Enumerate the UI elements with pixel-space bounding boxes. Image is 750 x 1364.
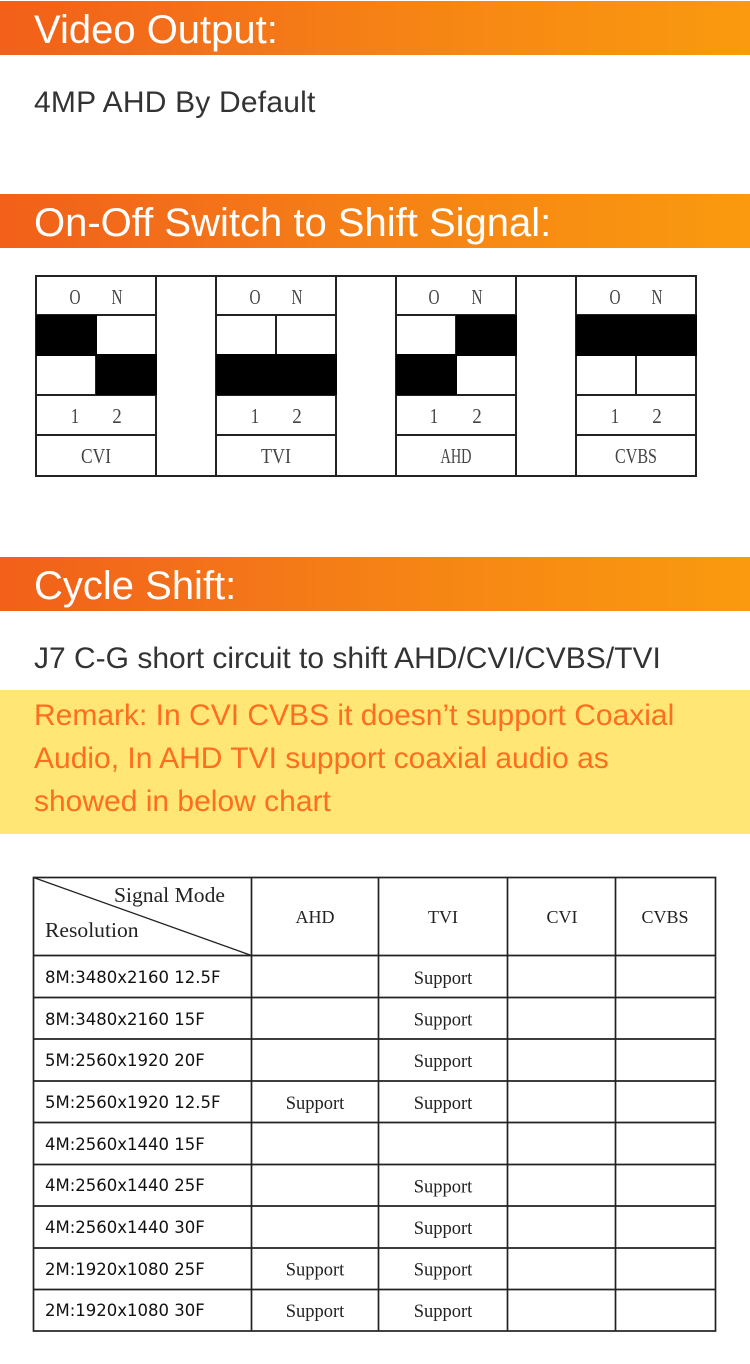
banner: On-Off Switch (0, 194, 750, 248)
diagram: switch settings: 2 (472, 404, 482, 428)
diagram: switch settings: O (70, 285, 80, 309)
table: resolution support by signal mode: Support (414, 1010, 473, 1030)
table: resolution support by signal mode: Support (286, 1094, 345, 1114)
diagram: switch settings: N (112, 285, 122, 309)
table: resolution support by signal mode: 5M:2560x1920 12.5F (45, 1093, 221, 1112)
diagram: switch settings: CVBS (615, 444, 657, 468)
table: resolution support by signal mode (32, 876, 716, 1332)
diagram: switch settings: 1 (71, 404, 79, 428)
banner: Cycle Shift (0, 557, 750, 611)
diagram: switch settings: 2 (112, 404, 122, 428)
diagram: switch settings: O (610, 285, 620, 309)
banner: On-Off Switch: On-Off Switch to Shift Signal: (34, 201, 551, 245)
table: resolution support by signal mode: 4M:2560x1440 25F (45, 1176, 205, 1195)
table: resolution support by signal mode: Resolution (45, 918, 139, 942)
diagram: switch settings: N (292, 285, 302, 309)
callout: remark: Remark: In CVI CVBS it doesn’t support Coaxial (34, 699, 674, 732)
diagram: switch settings: N (472, 285, 482, 309)
callout: remark (0, 690, 750, 834)
diagram: switch settings (35, 275, 697, 477)
table: resolution support by signal mode: Support (286, 1260, 345, 1280)
table: resolution support by signal mode: Signal Mode (114, 883, 225, 907)
table: resolution support by signal mode: 4M:2560x1440 15F (45, 1135, 205, 1154)
table: resolution support by signal mode: Support (286, 1302, 345, 1322)
diagram: switch settings: 1 (430, 404, 438, 428)
diagram: switch settings: 1 (611, 404, 619, 428)
diagram: switch settings: N (652, 285, 662, 309)
table: resolution support by signal mode: Support (414, 1094, 473, 1114)
diagram: switch settings: 2 (652, 404, 662, 428)
callout: remark: showed in below chart (34, 785, 331, 818)
diagram: switch settings: O (250, 285, 260, 309)
diagram: switch settings: TVI (261, 444, 291, 468)
diagram: switch settings: O (428, 285, 440, 309)
table: resolution support by signal mode: CVI (546, 907, 578, 927)
diagram: switch settings: 2 (292, 404, 302, 428)
table: resolution support by signal mode: Support (414, 1178, 473, 1198)
table: resolution support by signal mode: Support (414, 1260, 473, 1280)
table: resolution support by signal mode: Support (414, 1302, 473, 1322)
table: resolution support by signal mode: 5M:2560x1920 20F (45, 1051, 205, 1070)
table: resolution support by signal mode: 2M:1920x1080 30F (45, 1301, 205, 1320)
banner: Cycle Shift: Cycle Shift: (34, 564, 236, 608)
table: resolution support by signal mode: CVBS (641, 907, 689, 927)
table: resolution support by signal mode: TVI (428, 907, 458, 927)
table: resolution support by signal mode: 8M:3480x2160 12.5F (45, 968, 221, 987)
callout: remark: Audio, In AHD TVI support coaxial audio as (34, 742, 609, 775)
text: default mode: 4MP AHD By Default (34, 86, 316, 119)
table: resolution support by signal mode: AHD (296, 907, 334, 927)
diagram: switch settings: CVI (81, 444, 111, 468)
table: resolution support by signal mode: 4M:2560x1440 30F (45, 1218, 205, 1237)
diagram: switch settings: 1 (251, 404, 259, 428)
table: resolution support by signal mode: 8M:3480x2160 15F (45, 1010, 205, 1029)
text: cycle shift instruction: J7 C-G short circuit to shift AHD/CVI/CVBS/TVI (34, 642, 661, 675)
diagram: switch settings: AHD (440, 444, 472, 468)
table: resolution support by signal mode: 2M:1920x1080 25F (45, 1260, 205, 1279)
banner: Video Output (0, 1, 750, 55)
table: resolution support by signal mode: Support (414, 969, 473, 989)
banner: Video Output: Video Output: (34, 8, 278, 52)
table: resolution support by signal mode: Support (414, 1052, 473, 1072)
table: resolution support by signal mode: Support (414, 1219, 473, 1239)
